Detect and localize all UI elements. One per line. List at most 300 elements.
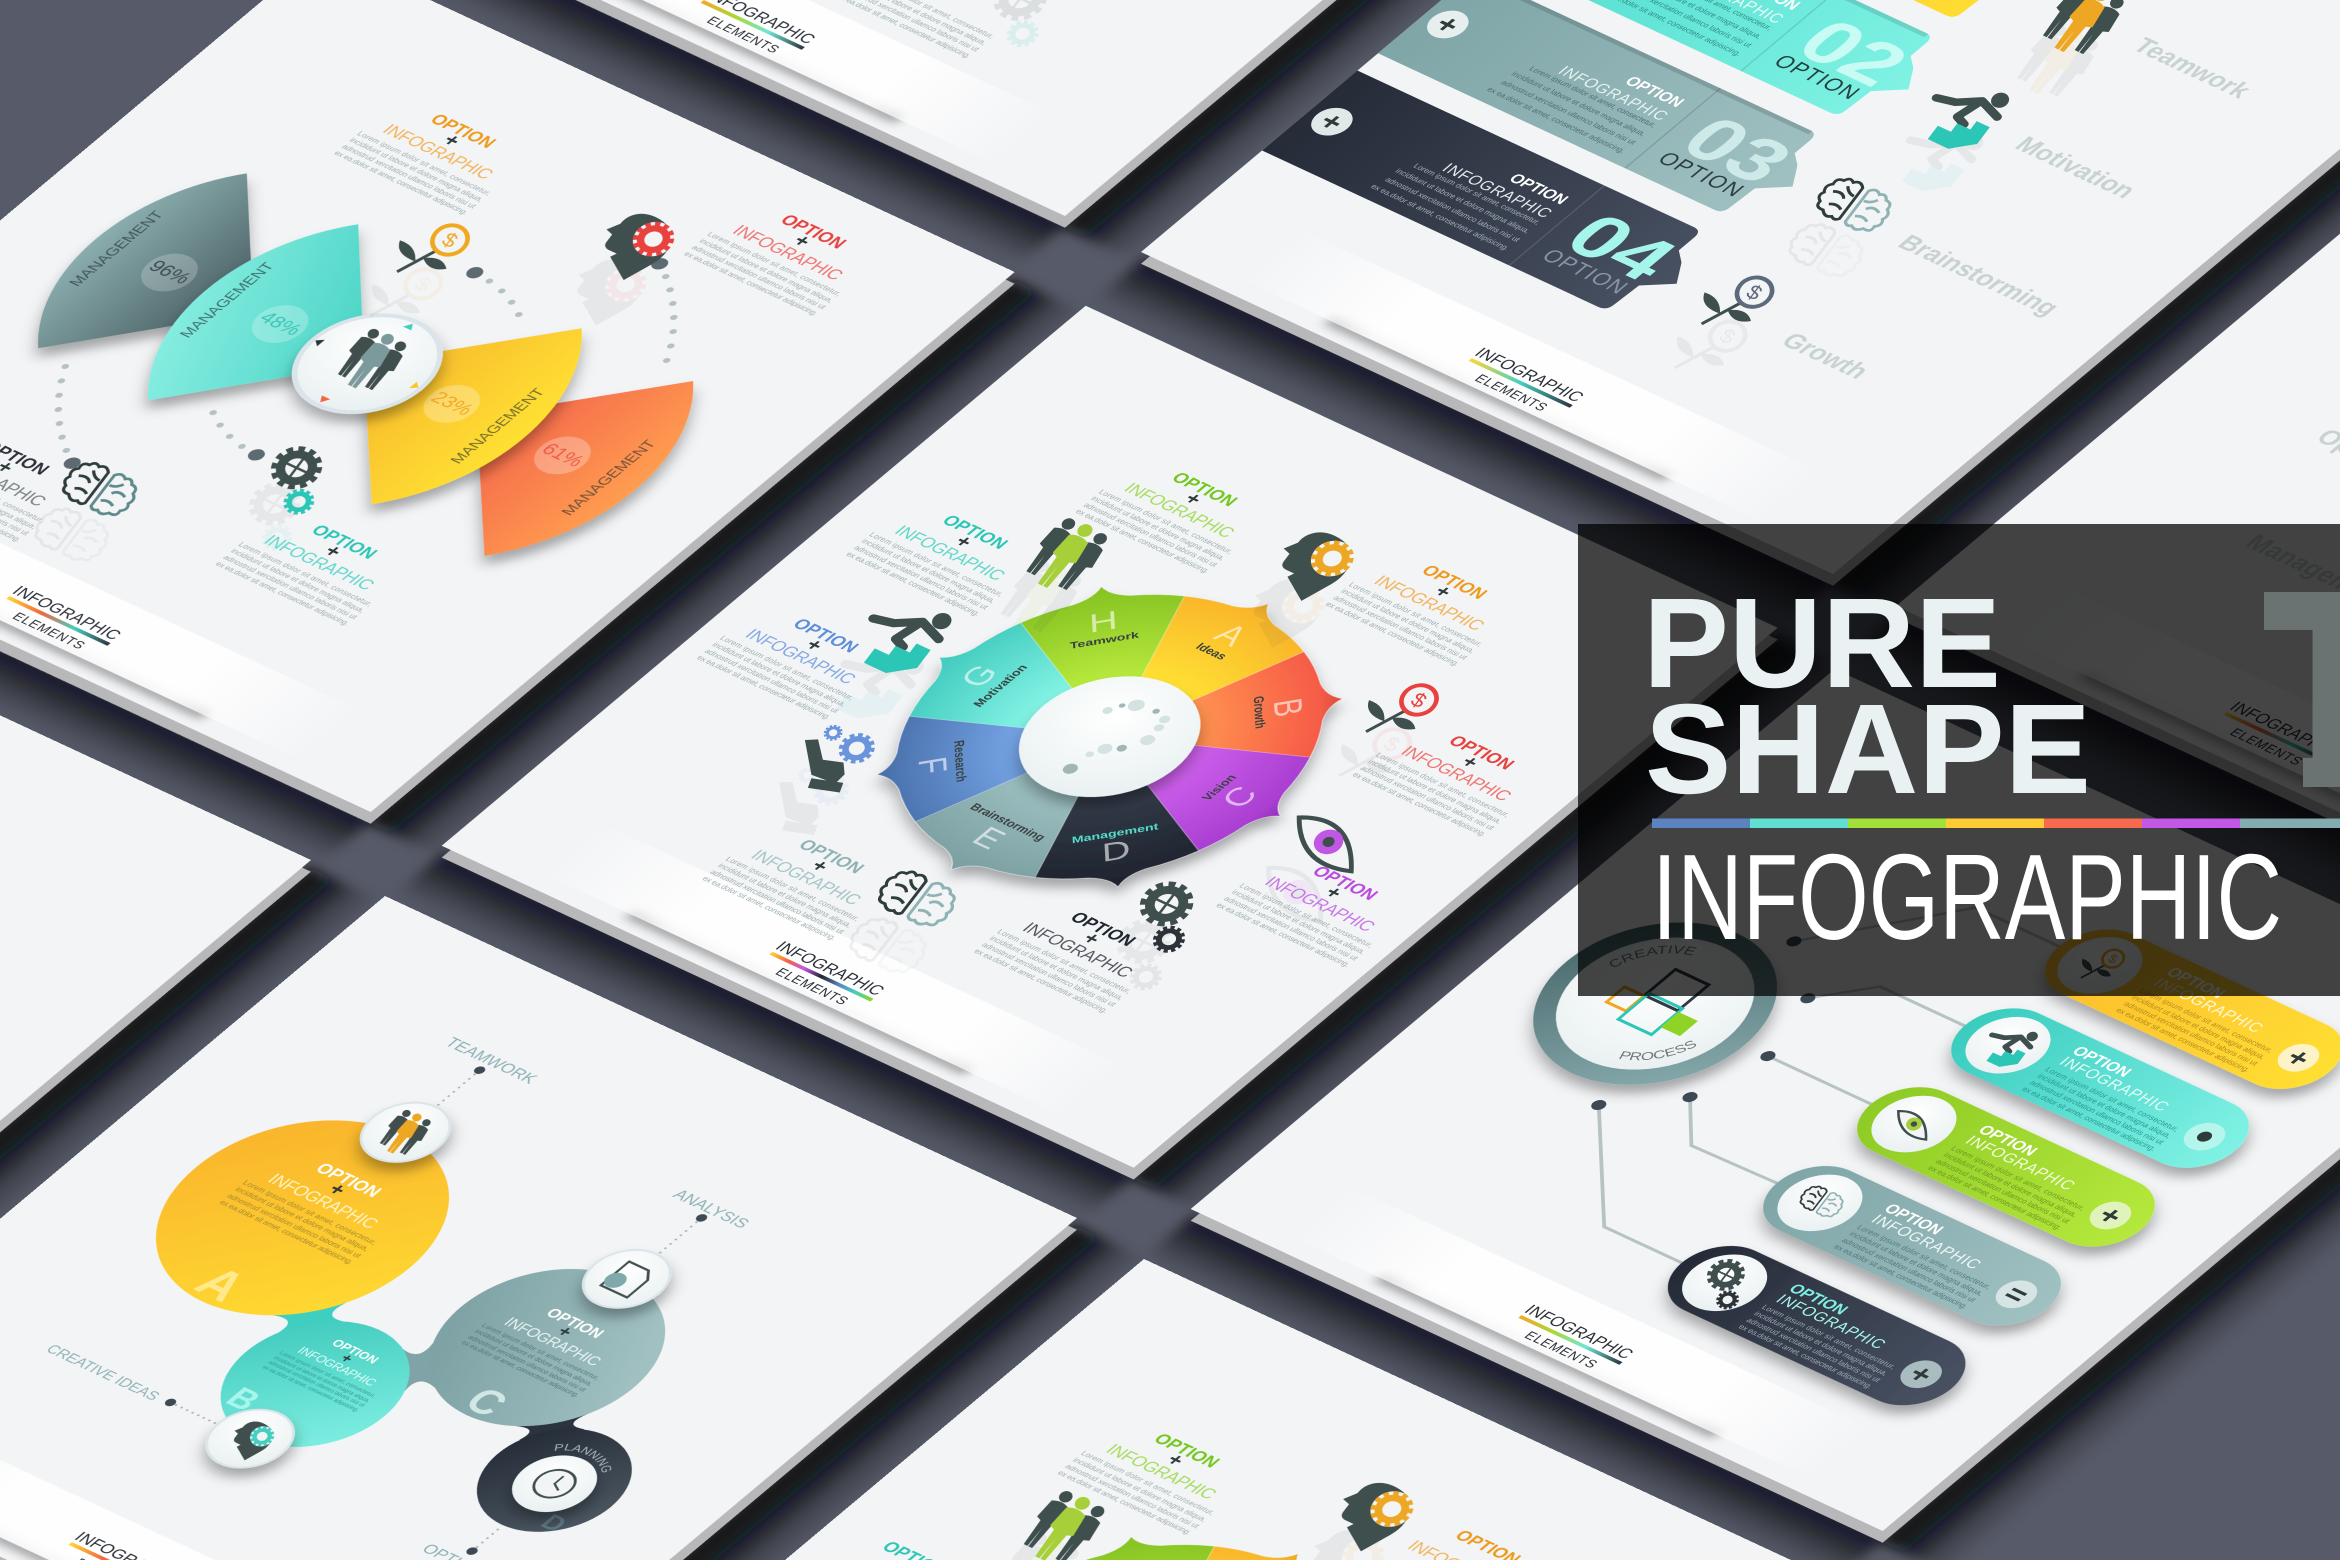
wheel letters: B <box>1265 696 1310 720</box>
sector: grey: MANAGEMENT <box>66 209 168 289</box>
text block: orange: ex ea.dolor sit amet, consectetur adipisicing. <box>1323 600 1462 668</box>
text block: red: OPTION <box>776 211 851 252</box>
pill: grey: incididunt ut labore et dolore magna aliqua, <box>1847 1230 1986 1297</box>
logo: ELEMENTS <box>703 14 783 56</box>
text block: orange: INFOGRAPHIC <box>1370 572 1490 634</box>
dark title overlay panel <box>1578 524 2340 996</box>
ribbon 04: OPTION <box>1505 171 1572 207</box>
connector lines <box>1507 865 2069 1267</box>
pill: green: Lorem ipsum dolor sit amet, consectetur, <box>1949 1145 2088 1212</box>
pill: green <box>1836 1074 2176 1259</box>
ribbon 03: incididunt ut labore et dolore magna aliqua, <box>1509 70 1648 138</box>
sheet: bow-tie sectors <box>0 0 1024 824</box>
text block: green: Lorem ipsum dolor sit amet, consectetur, <box>1078 1450 1217 1517</box>
logo: ELEMENTS <box>1471 372 1551 414</box>
logo <box>1452 345 1588 421</box>
text block: purple: adnostrud xercitation ullamco laboris nisi ut <box>1222 895 1361 962</box>
text block: C: incididunt ut labore et dolore magna aliqua, <box>473 1329 594 1387</box>
pill: yellow: + <box>2277 1043 2320 1073</box>
text block: orange <box>332 94 538 217</box>
text block: A: adnostrud xercitation ullamco laboris nisi ut <box>225 1192 364 1260</box>
wheel letters: C <box>1214 781 1266 813</box>
text block: teal: adnostrud xercitation ullamco laboris nisi ut <box>852 544 991 611</box>
logo: ELEMENTS <box>772 966 852 1007</box>
text block: grey <box>700 819 906 942</box>
leader labels: TEAMWORK <box>441 1034 542 1087</box>
sector: yellow: 23% <box>426 388 478 419</box>
wheel labels: Teamwork <box>1070 629 1139 651</box>
text block: orange: Lorem ipsum dolor sit amet, consectetur, <box>1346 581 1485 648</box>
text block: orange: INFOGRAPHIC <box>378 121 498 183</box>
text block: teal: adnostrud xercitation ullamco laboris nisi ut <box>221 554 360 621</box>
bubble D: PLANNING <box>554 1444 612 1472</box>
pill: yellow: ex ea.dolor sit amet, consectetur adipisicing. <box>2114 1006 2252 1074</box>
pill: teal: Lorem ipsum dolor sit amet, consectetur, <box>2043 1066 2182 1133</box>
icon: head <box>550 203 689 333</box>
text block: teal: Lorem ipsum dolor sit amet, consectetur, <box>236 541 375 608</box>
text block: blue: INFOGRAPHIC <box>741 626 861 687</box>
wheel hub <box>981 654 1238 819</box>
text block: purple: incididunt ut labore et dolore magna aliqua, <box>1229 888 1368 956</box>
sheet: right list <box>1887 66 2340 940</box>
title: PURE <box>1643 572 2001 715</box>
text block: green: INFOGRAPHIC <box>1120 479 1240 541</box>
text block: red: incididunt ut labore et dolore magna aliqua, <box>697 237 836 304</box>
text block: green: adnostrud xercitation ullamco laboris nisi ut <box>1081 501 1220 569</box>
text block: dark: Lorem ipsum dolor sit amet, consectetur, <box>995 928 1134 995</box>
text block: B: adnostrud xercitation ullamco laboris nisi ut <box>266 1360 366 1409</box>
sheet: process pills <box>1190 672 2340 1543</box>
text block: grey: Lorem ipsum dolor sit amet, consectetur, <box>723 855 862 922</box>
text block: blue: ex ea.dolor sit amet, consectetur adipisicing. <box>695 654 833 721</box>
ribbon 04 <box>1262 71 1726 322</box>
text block: teal: + <box>318 541 347 562</box>
dotted arcs <box>0 121 741 606</box>
pill: grey: OPTION <box>1880 1201 1947 1238</box>
text block: purple: Lorem ipsum dolor sit amet, consectetur, <box>1237 882 1376 949</box>
ribbon 04: adnostrud xercitation ullamco laboris nisi ut <box>1383 176 1523 244</box>
text block: dark <box>0 420 91 544</box>
text block: orange: Lorem ipsum dolor sit amet, consectetur, <box>355 130 494 197</box>
list labels: Growth <box>1775 329 1875 384</box>
clock disc <box>494 1445 615 1523</box>
pill: dark: incididunt ut labore et dolore magna aliqua, <box>1752 1310 1890 1377</box>
icon: runner <box>1880 71 2017 200</box>
text block: dark <box>972 892 1178 1015</box>
text block: C: + <box>552 1322 578 1341</box>
text block: green <box>1073 452 1279 575</box>
wheel letters: H <box>1088 605 1118 639</box>
pill: yellow: INFOGRAPHIC <box>2149 975 2267 1036</box>
bubble A: A <box>183 1258 259 1310</box>
text block: B: Lorem ipsum dolor sit amet, consectetur, <box>277 1351 377 1399</box>
text block: dark: + <box>1077 929 1106 949</box>
text block: teal <box>213 504 419 628</box>
pill: green: adnostrud xercitation ullamco laboris nisi ut <box>1933 1158 2073 1225</box>
icon: plant <box>1654 262 1784 385</box>
colour bar <box>1652 818 2340 828</box>
wheel labels <box>887 593 1332 880</box>
text block: red: adnostrud xercitation ullamco laboris nisi ut <box>690 244 829 311</box>
pill: dark: INFOGRAPHIC <box>1772 1292 1890 1352</box>
text block: blue: adnostrud xercitation ullamco laboris nisi ut <box>702 647 842 715</box>
wheel letters: G <box>953 660 1006 693</box>
text block: C: OPTION <box>542 1306 607 1341</box>
ribbon 04: incididunt ut labore et dolore magna aliqua, <box>1393 167 1532 235</box>
icon: plant <box>1319 670 1448 792</box>
pill: dark: OPTION <box>1785 1281 1852 1318</box>
sheet: colour wheel <box>433 306 1787 1179</box>
text block: teal: INFOGRAPHIC <box>890 522 1010 584</box>
text block: A: ex ea.dolor sit amet, consectetur adipisicing. <box>217 1199 356 1266</box>
text block: green: ex ea.dolor sit amet, consectetur adipisicing. <box>1073 508 1212 575</box>
text block: green <box>1055 1413 1261 1537</box>
text block: dark: incididunt ut labore et dolore magna aliqua, <box>987 934 1126 1002</box>
wheel letters: E <box>964 821 1014 856</box>
ribbon 04: INFOGRAPHIC <box>1438 161 1556 221</box>
sheet: numbered ribbons <box>1132 0 2340 586</box>
text block: red: ex ea.dolor sit amet, consectetur adipisicing. <box>682 250 821 317</box>
text block: green: Lorem ipsum dolor sit amet, consectetur, <box>1097 488 1235 555</box>
logo: INFOGRAPHIC <box>771 938 889 999</box>
text block: A: Lorem ipsum dolor sit amet, consectetur, <box>240 1179 379 1246</box>
leader labels <box>22 1024 895 1560</box>
pill: grey: = <box>1995 1280 2037 1310</box>
text block: B <box>260 1324 409 1413</box>
text block: green: ex ea.dolor sit amet, consectetur adipisicing. <box>1055 1469 1194 1536</box>
text block: orange: adnostrud xercitation ullamco laboris nisi ut <box>1331 594 1470 661</box>
list labels: Brainstorming <box>1891 231 2065 320</box>
sector: orange: 61% <box>536 440 589 471</box>
wheel letters: F <box>909 754 955 777</box>
pill: dark: adnostrud xercitation ullamco laboris nisi ut <box>1744 1316 1883 1384</box>
bubble B: B <box>217 1382 269 1417</box>
text block: orange: OPTION <box>1417 562 1492 602</box>
text block: purple <box>1214 846 1420 969</box>
pill: teal: adnostrud xercitation ullamco laboris nisi ut <box>2027 1079 2167 1146</box>
sector: yellow: MANAGEMENT <box>447 386 549 466</box>
text block: B: OPTION <box>328 1336 383 1366</box>
sheet: bubbles <box>0 896 1078 1560</box>
text block: green: OPTION <box>1167 469 1242 510</box>
connector dots <box>1588 934 1876 1145</box>
text block: teal: Lorem ipsum dolor sit amet, consectetur, <box>867 531 1006 598</box>
icon: gears <box>1093 877 1217 993</box>
ribbon 03: 03 <box>1664 105 1809 196</box>
pill: dark <box>1646 1233 1987 1418</box>
text block: teal: ex ea.dolor sit amet, consectetur adipisicing. <box>213 560 352 627</box>
wheel labels: Ideas <box>1193 641 1231 662</box>
text block: grey: ex ea.dolor sit amet, consectetur adipisicing. <box>700 875 839 942</box>
text block: orange: + <box>1428 582 1457 602</box>
pill: green: ex ea.dolor sit amet, consectetur adipisicing. <box>1926 1164 2064 1231</box>
wheel labels: Vision <box>1199 773 1239 802</box>
icon: people <box>2003 0 2137 105</box>
ribbon 04: 04 <box>1548 202 1694 294</box>
text block: B: INFOGRAPHIC <box>294 1344 381 1389</box>
text block: red: + <box>787 231 816 252</box>
logo <box>684 0 820 63</box>
text block: C <box>459 1291 639 1399</box>
icon: people <box>986 513 1120 641</box>
sheet: bottom wheel <box>491 1259 1845 1560</box>
ribbon 03: Lorem ipsum dolor sit amet, consectetur, <box>1527 65 1659 129</box>
bubble C <box>379 1240 714 1456</box>
disc: creative ideas <box>189 1399 312 1478</box>
leader labels: CREATIVE IDEAS <box>42 1342 163 1404</box>
text block: orange: incididunt ut labore et dolore magna aliqua, <box>1339 587 1477 655</box>
leader labels: ANALYSIS <box>668 1186 754 1232</box>
wheel letters: A <box>1206 618 1256 653</box>
text block: red: adnostrud xercitation ullamco laboris nisi ut <box>1358 764 1497 832</box>
text block: dark: OPTION <box>1066 909 1141 949</box>
sector: yellow <box>259 276 629 526</box>
text block: teal: INFOGRAPHIC <box>259 532 380 594</box>
sector: grey <box>0 152 358 400</box>
process circle contents <box>1604 946 1712 1060</box>
text block: orange: incididunt ut labore et dolore magna aliqua, <box>347 136 486 204</box>
list labels <box>2204 425 2340 612</box>
text block: blue: Lorem ipsum dolor sit amet, consectetur, <box>718 634 856 702</box>
pill: green: OPTION <box>1974 1122 2041 1159</box>
pill: teal: incididunt ut labore et dolore magna aliqua, <box>2035 1072 2174 1140</box>
text block: purple: OPTION <box>1308 862 1383 903</box>
process circle contents: CREATIVE <box>1610 946 1697 967</box>
icon: faint gear reflection <box>973 0 1067 50</box>
wheel segments <box>781 525 1438 949</box>
text block: blue: + <box>800 635 829 655</box>
wheel labels: Brainstorming <box>967 801 1049 843</box>
text block: purple: ex ea.dolor sit amet, consectetur adipisicing. <box>1214 901 1353 969</box>
pill: teal: INFOGRAPHIC <box>2055 1054 2173 1115</box>
text block: green: adnostrud xercitation ullamco laboris nisi ut <box>1063 1463 1202 1530</box>
list labels <box>1775 34 2300 418</box>
text block: A: incididunt ut labore et dolore magna aliqua, <box>233 1186 371 1253</box>
wheel labels: Motivation <box>970 663 1031 709</box>
text block: teal: incididunt ut labore et dolore magna aliqua, <box>229 547 367 614</box>
text block: A: OPTION <box>311 1160 386 1200</box>
ribbon 03 <box>1378 0 1842 225</box>
text block: red <box>1350 715 1556 838</box>
process circle contents: PROCESS <box>1619 1040 1696 1060</box>
text block: C: adnostrud xercitation ullamco laboris nisi ut <box>466 1334 587 1393</box>
text block: orange: ex ea.dolor sit amet, consectetur adipisicing. <box>332 149 470 216</box>
text block: green: incididunt ut labore et dolore magna aliqua, <box>1089 495 1228 562</box>
sector: orange: MANAGEMENT <box>558 438 660 518</box>
icon: plant <box>350 210 479 332</box>
text block: orange: + <box>437 131 466 151</box>
wheel labels: Research <box>951 739 969 783</box>
logo <box>52 1529 188 1560</box>
logo: INFOGRAPHIC <box>8 583 126 643</box>
title: SHAPE <box>1645 678 2091 821</box>
dotted leader lines <box>108 1070 844 1551</box>
ribbon 03: OPTION <box>1621 73 1688 110</box>
pill: grey: INFOGRAPHIC <box>1867 1212 1985 1272</box>
logo: INFOGRAPHIC <box>1520 1302 1638 1362</box>
pill: dark: + <box>1899 1360 1942 1390</box>
pill: grey <box>1742 1153 2082 1338</box>
sector: grey: 96% <box>143 257 196 288</box>
text block: red: INFOGRAPHIC <box>1397 743 1517 804</box>
pill: yellow: adnostrud xercitation ullamco laboris nisi ut <box>2121 1000 2261 1068</box>
pill: teal: ex ea.dolor sit amet, consectetur adipisicing. <box>2020 1085 2158 1153</box>
icon: hand with gears <box>748 716 884 843</box>
text block: A: + <box>322 1180 351 1200</box>
process circle <box>1483 892 1828 1115</box>
bubble C: C <box>455 1380 519 1424</box>
text block: green: + <box>1178 489 1207 509</box>
text block: blue: incididunt ut labore et dolore magna aliqua, <box>710 641 849 708</box>
text block: grey: INFOGRAPHIC <box>747 846 867 908</box>
list labels: Teamwork <box>2127 34 2257 103</box>
ribbon 03: OPTION <box>1652 148 1750 200</box>
ribbon 04: ex ea.dolor sit amet, consectetur adipisicing. <box>1369 183 1512 252</box>
text block: C: Lorem ipsum dolor sit amet, consectetur, <box>480 1323 601 1382</box>
text block: teal: OPTION <box>307 521 382 562</box>
ribbon 01 <box>1610 0 2074 31</box>
icon: runner <box>813 590 960 728</box>
logo: ELEMENTS <box>9 610 89 652</box>
pill: yellow: incididunt ut labore et dolore magna aliqua, <box>2129 993 2268 1061</box>
bubble B <box>182 1298 449 1470</box>
text block: purple: INFOGRAPHIC <box>1260 873 1380 935</box>
text block: grey: + <box>805 856 834 876</box>
ribbon 04: OPTION <box>1536 245 1634 298</box>
text block: grey: incididunt ut labore et dolore magna aliqua, <box>716 862 854 929</box>
ribbon 03: adnostrud xercitation ullamco laboris nisi ut <box>1499 79 1639 146</box>
pill: teal: OPTION <box>2068 1043 2135 1080</box>
ribbon 03: INFOGRAPHIC <box>1554 63 1672 124</box>
wheel top <box>914 1475 1461 1560</box>
title <box>1643 572 2091 821</box>
wheel letters: D <box>1101 835 1131 868</box>
pill: green: INFOGRAPHIC <box>1961 1133 2079 1193</box>
wheel labels: Growth <box>1250 695 1268 730</box>
text block: B: ex ea.dolor sit amet, consectetur adipisicing. <box>260 1365 360 1413</box>
text block: green: + <box>1160 1450 1189 1471</box>
wheel letters <box>827 554 1392 919</box>
sheet: top centre <box>364 0 1718 228</box>
ribbon 03: ex ea.dolor sit amet, consectetur adipisicing. <box>1485 85 1628 155</box>
text block: C: INFOGRAPHIC <box>500 1315 605 1369</box>
text block: orange: adnostrud xercitation ullamco laboris nisi ut <box>340 143 479 210</box>
pill: dark: Lorem ipsum dolor sit amet, consectetur, <box>1759 1303 1898 1371</box>
text block: green: incididunt ut labore et dolore magna aliqua, <box>1071 1456 1209 1523</box>
icon: head <box>1284 1472 1428 1560</box>
text block: A <box>217 1143 423 1266</box>
text block: red: INFOGRAPHIC <box>728 222 848 284</box>
text block: A: INFOGRAPHIC <box>264 1170 384 1232</box>
text block: teal: incididunt ut labore et dolore magna aliqua, <box>859 537 998 605</box>
question mark dots <box>1041 692 1182 789</box>
logo: INFOGRAPHIC <box>2225 699 2340 759</box>
dotted arc ends <box>60 151 672 576</box>
logo <box>1502 1302 1638 1378</box>
text block: orange <box>1403 1516 1548 1560</box>
text block: grey: adnostrud xercitation ullamco laboris nisi ut <box>708 868 847 936</box>
logo <box>753 938 889 1014</box>
text block: dark: adnostrud xercitation ullamco laboris nisi ut <box>980 941 1119 1008</box>
text block: red: + <box>1455 752 1484 772</box>
sector: teal: 48% <box>254 309 306 340</box>
bubble D <box>476 1429 632 1537</box>
logo: ELEMENTS <box>1521 1329 1601 1371</box>
logo: INFOGRAPHIC <box>1470 345 1588 405</box>
sector: teal <box>101 202 469 452</box>
pill: grey: Lorem ipsum dolor sit amet, consectetur, <box>1855 1224 1993 1291</box>
leader dots <box>100 1065 852 1556</box>
text block: green: OPTION <box>1149 1430 1224 1471</box>
sector: orange <box>372 329 739 577</box>
text block: green: INFOGRAPHIC <box>1102 1441 1222 1503</box>
text block: teal <box>844 495 1050 618</box>
logo <box>2207 699 2340 775</box>
list labels: Motivation <box>2009 133 2142 203</box>
text block: B: incididunt ut labore et dolore magna aliqua, <box>272 1356 371 1404</box>
text block: dark: ex ea.dolor sit amet, consectetur adipisicing. <box>972 947 1110 1015</box>
icon: gears <box>226 442 345 553</box>
big numeral <box>2264 592 2340 787</box>
text block: purple: + <box>1319 883 1348 903</box>
logo: ELEMENTS <box>2226 726 2306 768</box>
pill: grey: adnostrud xercitation ullamco laboris nisi ut <box>1839 1236 1979 1304</box>
pill: teal <box>1930 996 2270 1181</box>
text block: dark: INFOGRAPHIC <box>1018 919 1138 981</box>
disc: analysis <box>565 1239 688 1319</box>
text block: blue <box>695 598 900 721</box>
centre disc <box>260 295 474 433</box>
icon: brain <box>837 865 968 979</box>
pill: yellow: OPTION <box>2162 964 2229 1001</box>
text block: red: Lorem ipsum dolor sit amet, consectetur, <box>1373 751 1512 819</box>
text block: B: + <box>336 1351 358 1366</box>
pill: green: incididunt ut labore et dolore magna aliqua, <box>1941 1151 2080 1218</box>
pill: grey: ex ea.dolor sit amet, consectetur adipisicing. <box>1832 1243 1970 1310</box>
text block: orange <box>1323 545 1529 668</box>
pill: green: + <box>2089 1201 2131 1231</box>
ribbon 02: OPTION <box>1768 50 1866 103</box>
pill: yellow: Lorem ipsum dolor sit amet, consectetur, <box>2137 987 2276 1054</box>
text block: C: ex ea.dolor sit amet, consectetur adipisicing. <box>459 1340 580 1399</box>
text block: red: OPTION <box>1444 732 1519 773</box>
ribbon 03: + <box>1426 10 1469 40</box>
text block: teal: OPTION <box>938 511 1013 552</box>
wheel labels: Management <box>1072 821 1159 846</box>
ribbon 02: 02 <box>1780 7 1925 99</box>
icon: head <box>1225 522 1369 656</box>
icon: brain <box>1777 172 1904 282</box>
pill: yellow <box>2024 917 2340 1102</box>
text block: orange: OPTION <box>426 110 501 151</box>
text block: red <box>682 194 888 318</box>
icon: brain <box>23 457 149 567</box>
sector: teal: MANAGEMENT <box>177 261 278 340</box>
text block: teal: ex ea.dolor sit amet, consectetur adipisicing. <box>844 550 983 617</box>
text block: grey: OPTION <box>794 836 869 877</box>
pill: dark: ex ea.dolor sit amet, consectetur adipisicing. <box>1736 1323 1875 1390</box>
ribbon 04: + <box>1310 107 1353 137</box>
text block: red: incididunt ut labore et dolore magna aliqua, <box>1366 758 1504 825</box>
icon: eye <box>1243 811 1378 925</box>
ribbon 04: Lorem ipsum dolor sit amet, consectetur, <box>1411 162 1543 226</box>
ribbon 02 <box>1494 0 1958 128</box>
text block: red: ex ea.dolor sit amet, consectetur adipisicing. <box>1350 771 1489 838</box>
text block: teal: + <box>949 532 978 552</box>
disc: teamwork <box>343 1092 468 1173</box>
bubble A <box>93 1084 510 1353</box>
connector necks <box>261 1284 597 1459</box>
